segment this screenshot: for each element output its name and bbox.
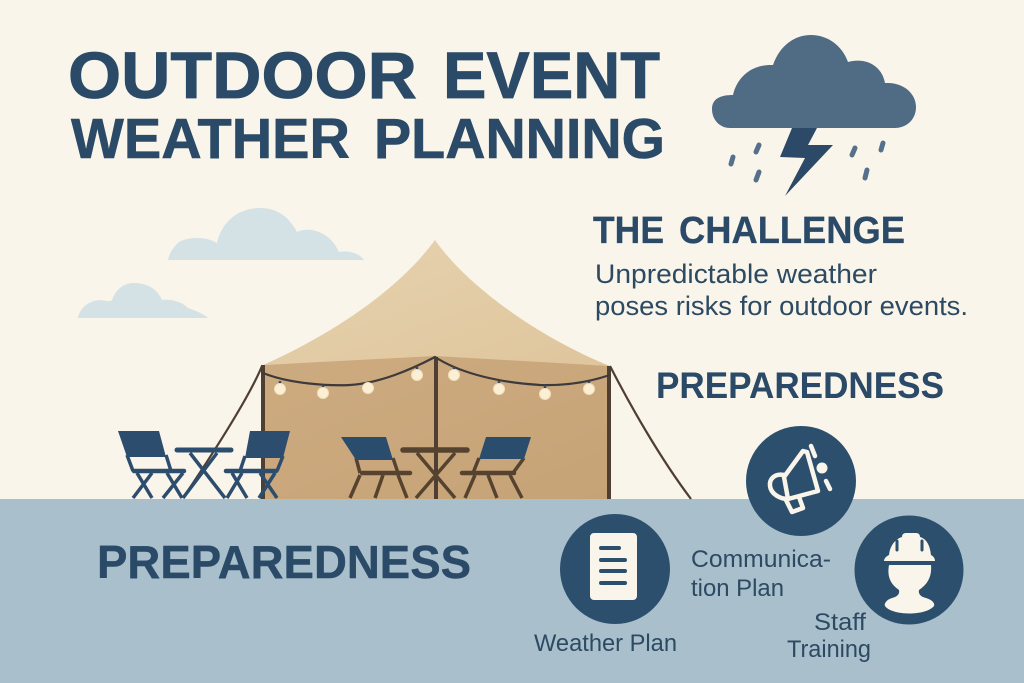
label: communication plan: tion Plan [691,575,784,602]
label: staff training: Training [787,636,871,663]
tent chair and table [341,437,531,498]
tent roof [263,240,610,366]
tent poles and ropes [183,357,691,499]
heading: preparedness left: PREPAREDNESS [97,536,471,588]
title: OUTDOOR [68,38,417,112]
label: communication plan [691,546,831,602]
label: weather plan: Weather Plan [534,630,677,657]
challenge description [595,259,968,321]
challenge description: poses risks for outdoor events. [595,291,968,321]
background cloud large [168,208,364,260]
tent wall [263,356,610,499]
title [68,38,665,171]
title: WEATHER [71,107,350,171]
heading: the challenge: THE [593,210,664,252]
heading: preparedness right: PREPAREDNESS [656,365,944,406]
label: staff training [787,609,871,663]
title: PLANNING [374,107,665,171]
outdoor furniture set [118,431,531,498]
heading: the challenge: CHALLENGE [679,210,905,252]
icon: staff hard hat [854,516,964,624]
title: EVENT [443,38,660,112]
challenge description: Unpredictable weather [595,259,877,289]
icon: communication megaphone [746,426,856,536]
background cloud small [78,283,208,318]
tent [183,240,691,499]
icon: storm cloud [712,35,916,196]
string lights [263,357,610,400]
ground band [0,499,1024,683]
label: staff training: Staff [814,609,866,636]
left chair and table [118,431,290,498]
label: communication plan: Communica- [691,546,831,573]
icon: weather plan document [560,514,670,624]
